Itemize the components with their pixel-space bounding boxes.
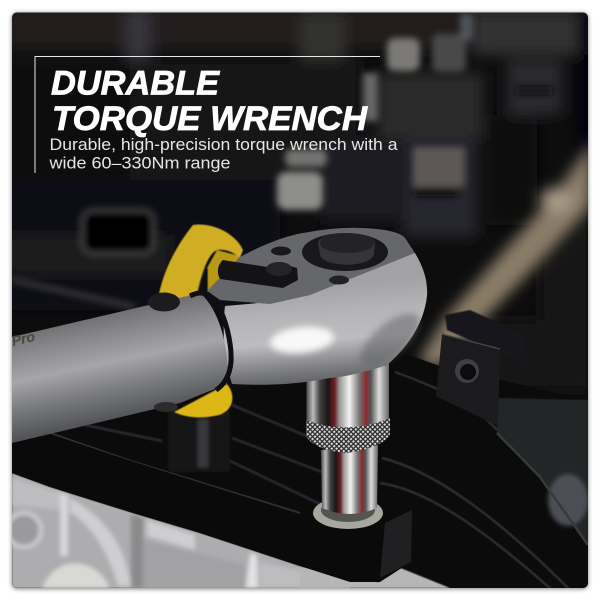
- shaft pin: [148, 292, 180, 312]
- wrench shaft: [10, 292, 231, 443]
- black post under loop: [168, 410, 230, 472]
- vent slats: [85, 405, 340, 505]
- subtitle: Durable, high-precision torque wrench with a: [50, 136, 398, 154]
- black plastic engine cover: [12, 352, 588, 588]
- yellow loop: [159, 224, 243, 417]
- bracket with hole: [436, 310, 500, 426]
- socket: [306, 362, 390, 529]
- wrench head: [207, 228, 428, 385]
- right engine cover detail: [380, 372, 588, 590]
- faint brand lettering: Pro: [10, 328, 37, 349]
- subtitle: wide 60–330Nm range: [48, 154, 230, 172]
- lower screw: [329, 276, 349, 284]
- inner surface: [207, 250, 240, 292]
- socket base collar: [313, 502, 383, 529]
- blurred background details: [12, 14, 552, 307]
- title: DURABLE: [51, 64, 220, 102]
- silver engine block: [7, 473, 450, 588]
- title: TORQUE WRENCH: [52, 100, 368, 138]
- highlight: [269, 324, 335, 356]
- thumb lever: [218, 260, 298, 288]
- subtitle: [48, 136, 398, 172]
- title frame: [35, 56, 380, 173]
- upper socket: [306, 362, 389, 430]
- top face plate: [207, 228, 415, 304]
- black moulded ledge: [12, 434, 412, 582]
- title: [51, 64, 368, 138]
- front band: [159, 224, 243, 299]
- right silver sliver: [300, 567, 450, 588]
- top screw: [271, 246, 291, 256]
- lower socket: [321, 445, 378, 514]
- lower pin: [154, 402, 178, 412]
- blurred engine background: [0, 0, 600, 390]
- ledge top edge: [50, 433, 300, 513]
- knurled band: [306, 418, 390, 453]
- release button: [302, 233, 388, 271]
- dark gap: [197, 268, 208, 294]
- black O-ring: [190, 293, 231, 390]
- lower band: [174, 384, 232, 417]
- blurred beige pipe: [418, 140, 592, 368]
